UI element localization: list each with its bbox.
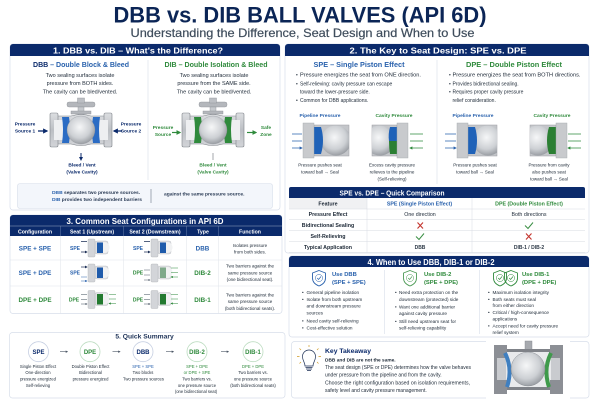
arrow: source 2 xyxy=(114,130,122,132)
SPE text block: toward the lower-pressure side. xyxy=(300,90,370,96)
column: use DBB: • xyxy=(302,290,304,295)
DIB column: DIB – Double Isolation & Bleed xyxy=(164,60,268,69)
diagram: SPE cavity pressure: relieves to the pipeline xyxy=(370,170,415,174)
item: DIB-2: DIB-2 xyxy=(189,350,205,356)
column: use DBB xyxy=(302,270,366,330)
DPE text block xyxy=(449,60,580,104)
item: DPE xyxy=(72,342,110,382)
row: SPE + DPE xyxy=(19,264,275,282)
label: pressure source 2: Pressure xyxy=(121,122,141,128)
column: use DBB: Use DBB xyxy=(332,272,357,278)
table: quick comparison: Bidirectional Sealing xyxy=(302,223,354,229)
column: use DBB: General pipeline isolation xyxy=(306,290,360,295)
item: SPE: SPE xyxy=(32,350,45,356)
column: use DIB-2: Use DIB-2 xyxy=(424,272,451,278)
icon: shield xyxy=(404,270,416,286)
icon: check xyxy=(416,234,424,240)
panel: quick summary xyxy=(10,332,285,398)
DIB column: The cavity can be bled/vented. xyxy=(177,90,252,96)
table header: Type xyxy=(197,230,209,236)
DIB column: Two sealing surfaces isolate xyxy=(180,73,248,79)
row: SPE + SPE: SPE + SPE xyxy=(19,245,51,252)
icon: light bulb xyxy=(297,345,321,370)
diagram: SPE cavity pressure: (Self-relieving) xyxy=(377,176,407,182)
row: SPE + SPE: SPE xyxy=(133,246,144,252)
column: use DIB-1: applications xyxy=(492,316,518,322)
column: use DIB-2 xyxy=(395,270,459,330)
DPE text block: Provides bidirectional sealing. xyxy=(452,82,519,88)
panel: seat configurations xyxy=(10,215,282,314)
arrow: source xyxy=(172,132,180,134)
item: SPE xyxy=(20,342,57,388)
item: DIB-2: one pressure source xyxy=(178,383,217,388)
label: bleed vent: Bleed / Vent xyxy=(68,164,96,168)
diagram: DPE cavity pressure xyxy=(528,114,581,180)
column: use DIB-2: • xyxy=(395,319,397,324)
column: use DBB: • xyxy=(302,325,304,330)
arrow xyxy=(112,351,120,353)
label: safe zone: Safe xyxy=(261,126,271,131)
row: SPE + DPE: DIB-2 xyxy=(194,270,211,277)
SPE text block: Self-relieving: cavity pressure can escape xyxy=(300,82,392,88)
column: use DIB-1: Use DIB-1 xyxy=(522,272,549,278)
table: quick comparison xyxy=(289,187,585,252)
column: use DIB-2: Still need upstream seat for xyxy=(399,319,456,324)
item: DIB-1: DPE + DPE xyxy=(242,364,264,369)
DPE text block: DPE – Double Piston Effect xyxy=(466,60,563,69)
DPE text block: Requires proper cavity pressure xyxy=(452,90,524,96)
row: DPE + DPE: (both bidirectional seats). xyxy=(225,306,275,311)
label: bleed vent: (Valve Cavity) xyxy=(197,170,229,176)
heading: panel 5: 5. Quick Summary xyxy=(115,334,174,340)
panel: key takeaway xyxy=(292,340,589,399)
column: use DIB-1: relief system xyxy=(492,330,519,335)
icon: check xyxy=(525,222,533,228)
item: DIB-2: or DPE + SPE xyxy=(184,370,211,375)
SPE text block: • xyxy=(296,98,298,104)
diagram: DPE cavity pressure: toward ball → Seal xyxy=(530,176,568,182)
DIB column: pressure from the SAME side. xyxy=(177,81,251,87)
row: SPE + DPE: (one bidirectional seat). xyxy=(227,277,273,282)
row: DPE + DPE: Two barriers against the xyxy=(226,292,274,298)
heading: panel 4: 4. When to Use DBB, DIB-1 or DIB-2 xyxy=(368,257,495,267)
column: use DIB-1: Both seats must seal xyxy=(492,297,536,302)
DBB column: The cavity can be bled/vented. xyxy=(43,90,118,96)
label: pressure source: Source xyxy=(155,132,171,138)
column: use DBB: • xyxy=(302,318,304,323)
column: use DIB-1: Critical / high-consequence xyxy=(492,310,549,315)
column: use DBB: • xyxy=(302,297,304,302)
row: DPE + DPE: DPE xyxy=(69,298,80,304)
diagram: DPE pipeline pressure xyxy=(445,114,498,174)
DIB column xyxy=(153,60,272,176)
arrow xyxy=(221,351,228,353)
heading: key takeaway: Key Takeaway xyxy=(325,348,371,355)
DBB column: Two sealing surfaces isolate xyxy=(46,73,114,79)
diagram: DPE cavity pressure: also pushes seat xyxy=(532,170,567,174)
text: takeaway body: DBB and DIB are not the same. xyxy=(325,358,396,364)
diagram: DPE pipeline pressure: Pressure pushes seat xyxy=(453,162,497,168)
column: use DBB: Need cavity self-relieving xyxy=(306,318,359,323)
item: DBB: DBB xyxy=(136,350,150,356)
table: quick comparison: Typical Application xyxy=(304,245,352,251)
column: use DIB-1: Maximum isolation integrity xyxy=(492,290,550,295)
panel: DBB vs DIB xyxy=(10,44,280,210)
table: quick comparison: One direction xyxy=(404,212,436,218)
item: DBB: Two pressure sources xyxy=(123,376,164,382)
row: SPE + DPE: SPE + DPE xyxy=(19,270,51,277)
label: bleed vent: Bleed / Vent xyxy=(199,164,227,168)
text: takeaway body: The seat design (SPE or DPE) determines how the valve behaves xyxy=(325,365,471,371)
row: SPE + DPE: DPE xyxy=(133,270,144,276)
column: use DIB-2: self-relieving capability xyxy=(399,326,447,330)
table header xyxy=(18,230,261,236)
callout: difference: against the same pressure source. xyxy=(164,192,245,198)
diagram: SPE pipeline pressure: toward ball → Seal xyxy=(301,170,339,174)
diagram: SPE cavity pressure: Excess cavity pressure xyxy=(369,162,415,168)
text: takeaway body: safety level and cavity pressure management. xyxy=(325,388,427,394)
table header: Function xyxy=(239,230,261,236)
item: DIB-2: (one bidirectional seat) xyxy=(175,389,218,394)
icon: cross xyxy=(526,234,532,240)
SPE text block xyxy=(296,60,421,104)
text: takeaway body: under pressure from the pipeline and from the cavity. xyxy=(325,372,442,378)
panel: key to seat design xyxy=(285,44,589,253)
table: quick comparison: SPE (Single Piston Effect) xyxy=(387,202,452,208)
valve: DBB xyxy=(50,98,112,147)
item: SPE: One-direction xyxy=(25,370,51,375)
icon: shield xyxy=(312,270,326,286)
arrow xyxy=(60,351,68,353)
SPE text block: Common for DBB applications. xyxy=(300,98,368,104)
table: quick comparison: DPE (Double Piston Effect) xyxy=(495,202,563,208)
icon: cross xyxy=(418,222,423,228)
title: DBB vs. DIB BALL VALVES (API 6D) xyxy=(114,2,486,28)
item: DBB: Two blocks xyxy=(133,370,153,375)
column: use DIB-2: • xyxy=(395,290,397,295)
item: DPE: DPE xyxy=(84,350,96,356)
table: quick comparison: DBB xyxy=(415,245,426,251)
column: use DBB: sources xyxy=(306,310,324,315)
SPE text block: Pressure energizes the seat from ONE direction. xyxy=(300,73,421,79)
item: DIB-1 xyxy=(230,342,276,388)
item: DPE: pressure energized xyxy=(73,376,109,382)
column: use DIB-2: Want one additional barrier xyxy=(399,304,456,310)
diagram: DPE pipeline pressure: Pipeline Pressure xyxy=(452,113,494,119)
text: takeaway body xyxy=(325,358,471,394)
heading: panel 3: 3. Common Seat Configurations in API 6D xyxy=(66,216,224,226)
column: use DIB-1: • xyxy=(488,297,490,302)
row: SPE + SPE: Isolates pressure xyxy=(233,243,267,248)
row: DPE + DPE xyxy=(18,290,275,311)
row: SPE + DPE: same pressure source xyxy=(228,270,273,275)
diagram: DPE cavity pressure: Cavity Pressure xyxy=(534,113,571,119)
illustration: valve cutaway xyxy=(486,340,570,399)
item: DPE: Bidirectional xyxy=(79,370,102,375)
label: pressure source 2: Source 2 xyxy=(121,128,141,134)
label: safe zone: Zone xyxy=(260,132,272,138)
item: DBB xyxy=(123,342,164,382)
column: use DIB-1 xyxy=(488,270,559,335)
item: DIB-2: SPE + DPE xyxy=(186,364,208,369)
DBB column: pressure from BOTH sides. xyxy=(47,81,114,87)
table header: Configuration xyxy=(18,230,52,236)
column: use DIB-1: • xyxy=(488,290,490,295)
text: takeaway body: Choose the right configuration based on isolation requirements, xyxy=(325,380,470,386)
arrow: safe zone xyxy=(247,132,256,134)
column: use DIB-2: • xyxy=(395,304,397,310)
diagram: SPE pipeline pressure: Pipeline Pressure xyxy=(299,113,341,119)
table: quick comparison: DIB-1 / DIB-2 xyxy=(514,245,544,251)
label: bleed vent: (Valve Cavity) xyxy=(66,170,98,176)
diagram: SPE pipeline pressure xyxy=(292,113,351,174)
item: DPE: Double Piston Effect xyxy=(72,364,110,369)
callout: difference xyxy=(18,184,272,208)
column: use DBB: Cost-effective solution xyxy=(306,325,353,330)
column: use DIB-2: against cavity pressure xyxy=(399,311,447,316)
arrow: bleed xyxy=(80,153,82,160)
table: quick comparison: Pressure Effect xyxy=(309,212,348,218)
row: SPE + SPE: from both sides. xyxy=(234,250,266,255)
heading: panel 2: 2. The Key to Seat Design: SPE vs. DPE xyxy=(350,46,527,56)
heading: panel 1: 1. DBB vs. DIB – What's the Difference? xyxy=(53,46,223,56)
item: DIB-1: Two barriers vs. xyxy=(238,370,268,375)
column: use DIB-1: Accept need for cavity pressure xyxy=(492,323,559,328)
arrow: source 1 xyxy=(38,130,47,132)
DPE text block: Pressure energizes the seat from BOTH directions. xyxy=(452,73,580,79)
row: SPE + SPE xyxy=(19,239,268,257)
label: pressure source 1: Source 1 xyxy=(15,128,35,134)
column: use DIB-2: Need extra protection on the xyxy=(399,290,459,295)
table: quick comparison: Feature xyxy=(318,202,338,208)
column: use DIB-2: (SPE + DPE) xyxy=(424,280,458,286)
row: SPE + SPE: DBB xyxy=(196,245,210,252)
item: DBB: SPE + SPE xyxy=(132,364,154,369)
column: use DIB-2: downstream (protected) side xyxy=(399,297,459,302)
item: DIB-1: DIB-1 xyxy=(245,350,261,356)
row: DPE + DPE: DIB-1 xyxy=(194,297,211,304)
callout: difference: DIB provides two independent barriers xyxy=(52,197,142,203)
SPE text block: • xyxy=(296,73,298,79)
item: SPE: Single Piston Effect xyxy=(20,364,57,369)
table heading: SPE vs. DPE – Quick Comparison xyxy=(340,190,444,198)
row: DPE + DPE: DPE xyxy=(133,298,144,304)
diagram: DPE pipeline pressure: toward ball → Seal xyxy=(456,170,494,174)
item: DIB-1: one pressure source xyxy=(234,376,273,382)
DBB column xyxy=(15,60,142,176)
DPE text block: • xyxy=(449,90,451,96)
diagram: SPE cavity pressure: Cavity Pressure xyxy=(376,113,413,119)
table: quick comparison: Both directions xyxy=(511,212,547,218)
row: SPE + SPE: SPE xyxy=(70,246,81,252)
panel: when to use xyxy=(289,256,589,337)
column: use DIB-1: • xyxy=(488,310,490,315)
table header: Seat 1 (Upstream) xyxy=(70,230,114,236)
column: use DIB-1: (DPE + DPE) xyxy=(522,280,556,286)
column: use DIB-1: from either direction xyxy=(492,303,534,308)
table: quick comparison: Self-Relieving xyxy=(310,234,346,240)
row: SPE + DPE: Two barriers against the xyxy=(226,264,274,269)
icon: double shield xyxy=(494,270,518,286)
SPE text block: • xyxy=(296,82,298,88)
diagram: DPE cavity pressure: Pressure from cavity xyxy=(528,162,570,168)
table header: Seat 2 (Downstream) xyxy=(129,230,181,236)
subtitle: Understanding the Difference, Seat Design and When to Use xyxy=(130,26,475,40)
SPE text block: SPE – Single Piston Effect xyxy=(314,60,405,69)
DPE text block: • xyxy=(449,82,451,88)
item: DIB-1: (both bidirectional seats) xyxy=(230,383,276,388)
item: DIB-2: Two barriers vs. xyxy=(182,376,212,382)
DPE text block: relief consideration. xyxy=(452,98,496,104)
row: DPE + DPE: DPE + DPE xyxy=(18,297,52,304)
item: SPE: pressure energized xyxy=(20,376,57,382)
column: use DIB-1: • xyxy=(488,323,490,328)
label: pressure source 1: Pressure xyxy=(15,122,35,128)
item: DIB-2 xyxy=(175,342,218,394)
column: use DBB: and downstream pressure xyxy=(306,304,361,309)
arrow xyxy=(166,351,174,353)
DBB column: DBB – Double Block & Bleed xyxy=(33,60,129,69)
column: use DBB: (SPE + SPE) xyxy=(332,280,366,286)
DPE text block: • xyxy=(449,73,451,79)
item: SPE: Self-relieving xyxy=(26,383,51,388)
diagram: SPE pipeline pressure: Pressure pushes seat xyxy=(298,162,342,168)
label: pressure source: Pressure xyxy=(153,126,173,131)
row: DPE + DPE: same pressure source xyxy=(228,299,273,304)
callout: difference: DBB separates two pressure sources. xyxy=(52,190,141,196)
column: use DBB: Isolate from both upstream xyxy=(306,297,362,302)
row: SPE + DPE: SPE xyxy=(70,270,81,276)
valve: DIB xyxy=(182,98,244,147)
diagram: SPE cavity pressure xyxy=(365,113,423,182)
